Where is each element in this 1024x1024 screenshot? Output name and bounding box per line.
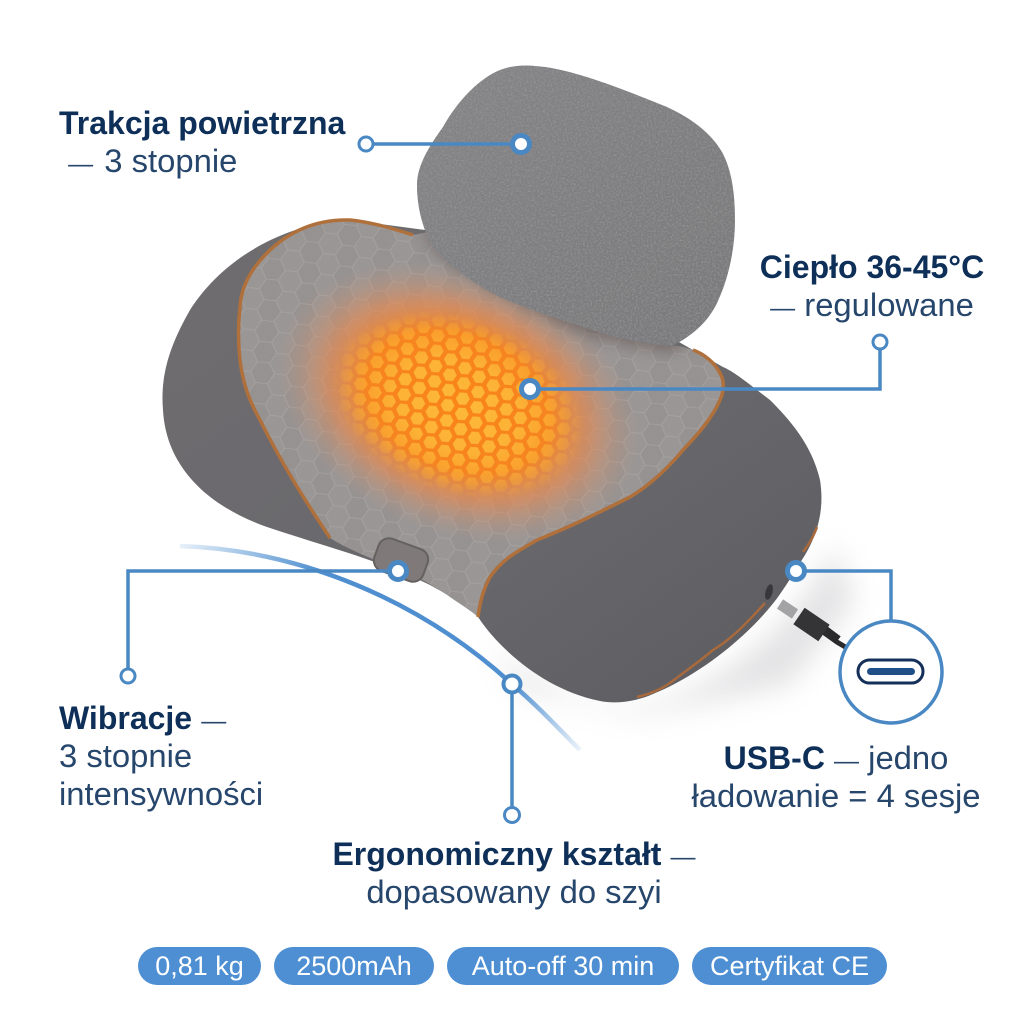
curve: ergonomic arc <box>180 546 580 750</box>
line: heat <box>522 335 887 398</box>
pill: weight <box>138 947 261 985</box>
label: air traction <box>59 105 346 179</box>
heated panel <box>236 218 726 618</box>
pill: weight: 0,81 kg <box>155 951 244 981</box>
label: air traction: — 3 stopnie <box>68 142 237 179</box>
label: ergonomic shape <box>332 836 696 910</box>
icon: USB cable <box>780 604 847 648</box>
shadow <box>490 545 855 716</box>
label: heat: Ciepło 36-45°C <box>760 249 984 285</box>
label: heat <box>760 249 984 323</box>
vibration button <box>371 535 431 585</box>
line: traction <box>359 136 530 152</box>
pill: certificate <box>692 947 887 985</box>
product illustration and callout lines <box>120 66 944 824</box>
heat glow <box>288 270 628 534</box>
label: ergonomic shape: dopasowany do szyi <box>366 873 662 910</box>
bottom seam <box>637 527 817 697</box>
label: USB-C: USB-C — jedno <box>724 739 948 776</box>
label: USB-C: ładowanie = 4 sesje <box>692 777 980 814</box>
line: vibration <box>121 562 406 683</box>
pill: battery: 2500mAh <box>296 951 412 981</box>
pill: battery <box>274 947 434 985</box>
label: vibration: Wibracje — <box>59 700 226 736</box>
label: USB-C <box>692 739 980 814</box>
pillow body <box>162 220 821 702</box>
label: ergonomic shape: Ergonomiczny kształt — <box>332 836 696 872</box>
icon: USB-C port <box>840 621 942 723</box>
line: shape <box>504 676 520 822</box>
pill: certificate: Certyfikat CE <box>710 951 869 981</box>
headrest contact shadow <box>422 232 688 356</box>
pill: auto-off <box>447 947 679 985</box>
label: vibration <box>59 700 263 812</box>
label: heat: — regulowane <box>770 286 974 323</box>
USB port <box>764 583 774 601</box>
line: USB <box>788 562 891 622</box>
label: air traction: Trakcja powietrzna <box>59 105 345 141</box>
label: vibration: intensywności <box>59 775 263 812</box>
headrest <box>417 65 735 346</box>
pill: auto-off: Auto-off 30 min <box>472 951 654 981</box>
glowing hexagons <box>342 318 574 492</box>
label: vibration: 3 stopnie <box>59 737 192 774</box>
